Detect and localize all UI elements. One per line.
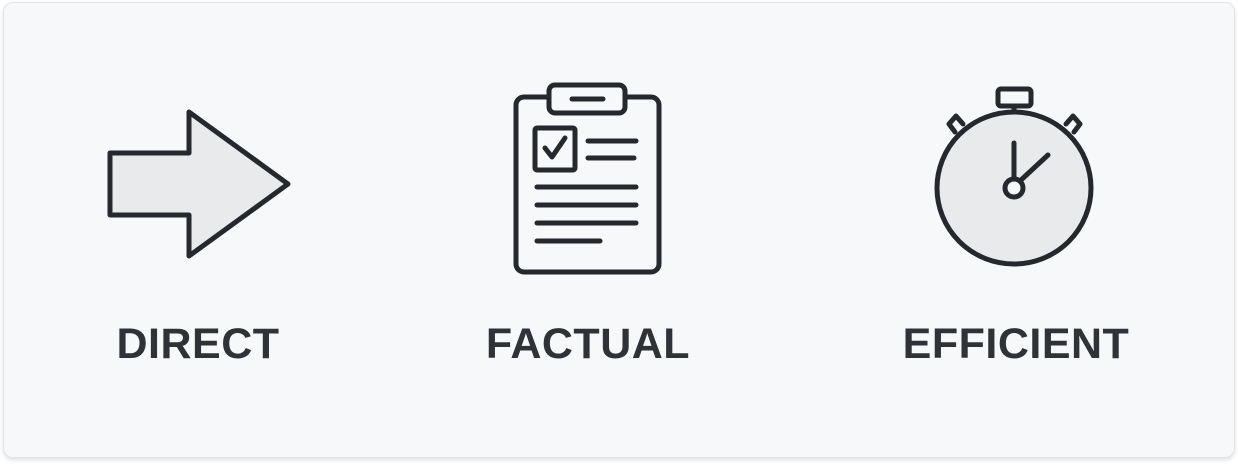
label: direct: DIRECT bbox=[116, 320, 280, 368]
label: factual: FACTUAL bbox=[486, 320, 690, 368]
label: efficient: EFFICIENT bbox=[903, 320, 1129, 368]
icon: arrow bbox=[110, 112, 288, 256]
icon: clipboard bbox=[516, 85, 659, 272]
icon: stopwatch bbox=[937, 89, 1091, 264]
